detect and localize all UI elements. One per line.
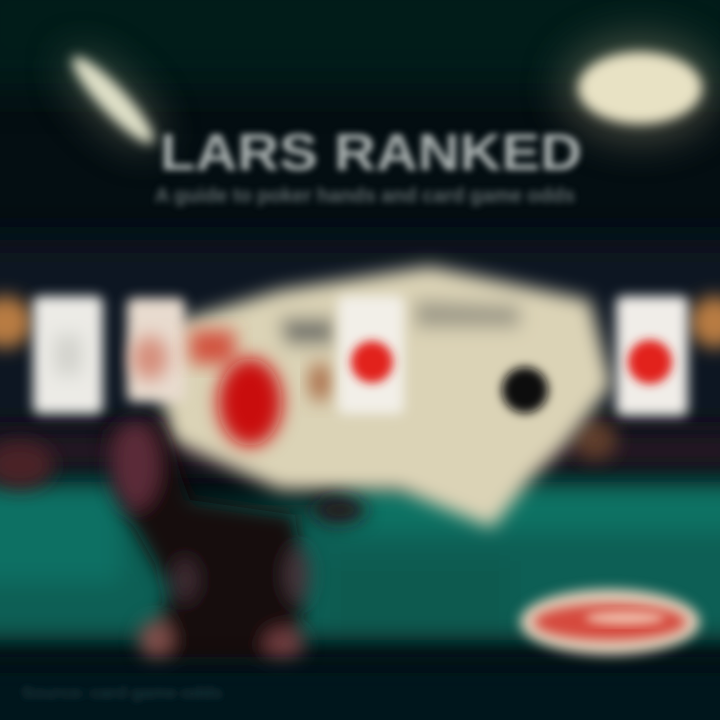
card: far left white (33, 296, 103, 414)
footer text: Source: card game odds (22, 685, 222, 702)
card mark (55, 335, 81, 375)
red circle (351, 341, 393, 383)
title: LARS RANKED (160, 124, 582, 182)
table front shadow (0, 665, 720, 720)
green table (0, 482, 720, 640)
card: second pink white (127, 298, 185, 402)
dark figure (105, 420, 366, 665)
red suit blob (218, 358, 282, 446)
fan of cards (150, 266, 612, 528)
side accents: orange (0, 296, 720, 489)
red circle (628, 340, 672, 384)
card mark (132, 336, 168, 380)
spotlight: upper left (64, 49, 162, 151)
card: right white with red circle (616, 296, 688, 416)
spotlight: upper right (578, 52, 702, 124)
card: red accent (190, 330, 235, 364)
chip plate (520, 589, 700, 655)
spotlight glow (52, 36, 718, 161)
chip stripes (534, 604, 686, 640)
black circle on card (502, 367, 548, 413)
card: centre white with red circle (338, 296, 404, 414)
subtitle: A guide to poker hands and card game odds (155, 185, 575, 207)
small brown mark (309, 362, 331, 402)
